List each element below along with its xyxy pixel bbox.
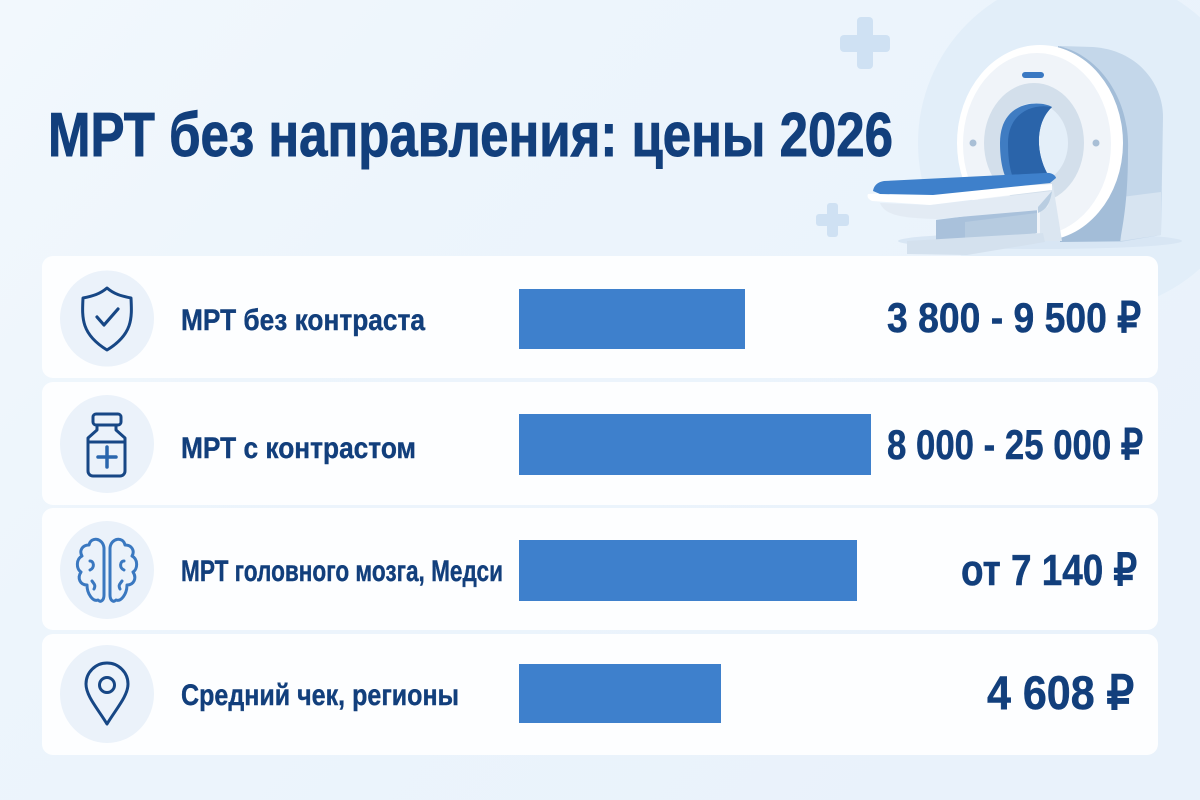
panel: MRI with contrast [42,382,1158,505]
label: МРТ головного мозга, Медси [181,555,503,588]
panel: brain MRI at Medsi [42,508,1158,630]
title: МРТ без направления: цены 2026 [48,101,893,170]
bar [519,540,857,601]
price: 8 000 - 25 000 ₽ [887,421,1143,468]
price: от 7 140 ₽ [961,546,1137,595]
icon: brain [60,521,154,619]
panel: MRI without contrast [42,256,1158,378]
price: 3 800 - 9 500 ₽ [887,294,1141,341]
icon: medicine bottle [60,395,154,493]
icon: small decorative plus [816,203,849,237]
icon: large decorative plus [840,17,890,69]
bar [519,289,745,349]
illustration: MRI scanner [868,45,1182,255]
panel: average check in regions [42,634,1158,755]
price: 4 608 ₽ [987,666,1134,719]
background circle behind scanner [918,0,1200,312]
bar [519,414,871,475]
label: Средний чек, регионы [181,679,459,712]
icon: shield with check [60,270,154,366]
label: МРТ с контрастом [181,432,416,465]
label: МРТ без контраста [181,304,425,337]
bar [519,664,721,723]
icon: map pin [60,645,154,743]
